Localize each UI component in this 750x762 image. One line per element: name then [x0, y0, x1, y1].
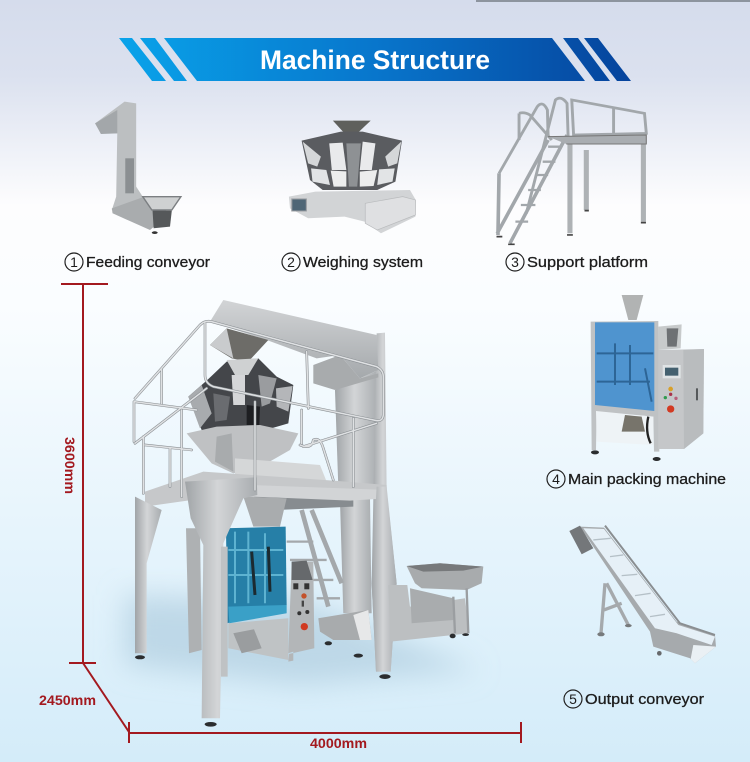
label: weighing system: Weighing system — [303, 254, 423, 271]
main machine illustration — [134, 300, 483, 727]
stairs — [287, 510, 342, 607]
label: main packing machine: 4 — [552, 471, 560, 487]
top right bar — [476, 0, 750, 2]
control box — [288, 561, 314, 662]
feeder hopper — [318, 563, 483, 642]
dimension lines — [61, 284, 521, 743]
dimension: 2450mm: 2450mm — [39, 692, 96, 708]
label: output conveyor: Output conveyor — [585, 691, 704, 708]
floor shadow — [125, 595, 480, 685]
icon: support platform — [497, 98, 646, 244]
railings — [134, 321, 383, 497]
right leg — [372, 487, 397, 672]
icon: main packing machine — [591, 295, 704, 461]
label: main packing machine: Main packing machine — [568, 471, 726, 488]
left legs — [135, 497, 162, 653]
label: weighing system: 2 — [287, 254, 295, 270]
label: output conveyor: 5 — [569, 691, 577, 707]
icon: feeding conveyor — [95, 102, 181, 234]
top bridge — [210, 300, 378, 378]
label: support platform: 3 — [511, 254, 519, 270]
front beam — [252, 485, 387, 501]
label: feeding conveyor: 1 — [70, 254, 78, 270]
icon: output conveyor — [569, 526, 716, 663]
neck — [243, 497, 287, 527]
feet — [135, 633, 469, 727]
dimension: 3600mm: 3600mm — [62, 437, 78, 494]
label: support platform: Support platform — [527, 254, 648, 271]
platform deck — [145, 472, 387, 507]
heading: Machine Structure — [260, 45, 490, 75]
banner: Machine Structure — [119, 38, 631, 81]
elevator column — [335, 333, 397, 672]
chute — [313, 355, 378, 390]
under-deck shadow — [253, 497, 353, 510]
blue panel — [226, 527, 287, 623]
multihead weigher — [187, 358, 327, 482]
label: feeding conveyor: Feeding conveyor — [86, 254, 210, 271]
dimension: 4000mm: 4000mm — [310, 735, 367, 751]
icon: weighing system — [289, 121, 416, 233]
bag chute — [233, 629, 262, 653]
rear cabinet — [186, 528, 202, 653]
hopper — [210, 328, 268, 362]
